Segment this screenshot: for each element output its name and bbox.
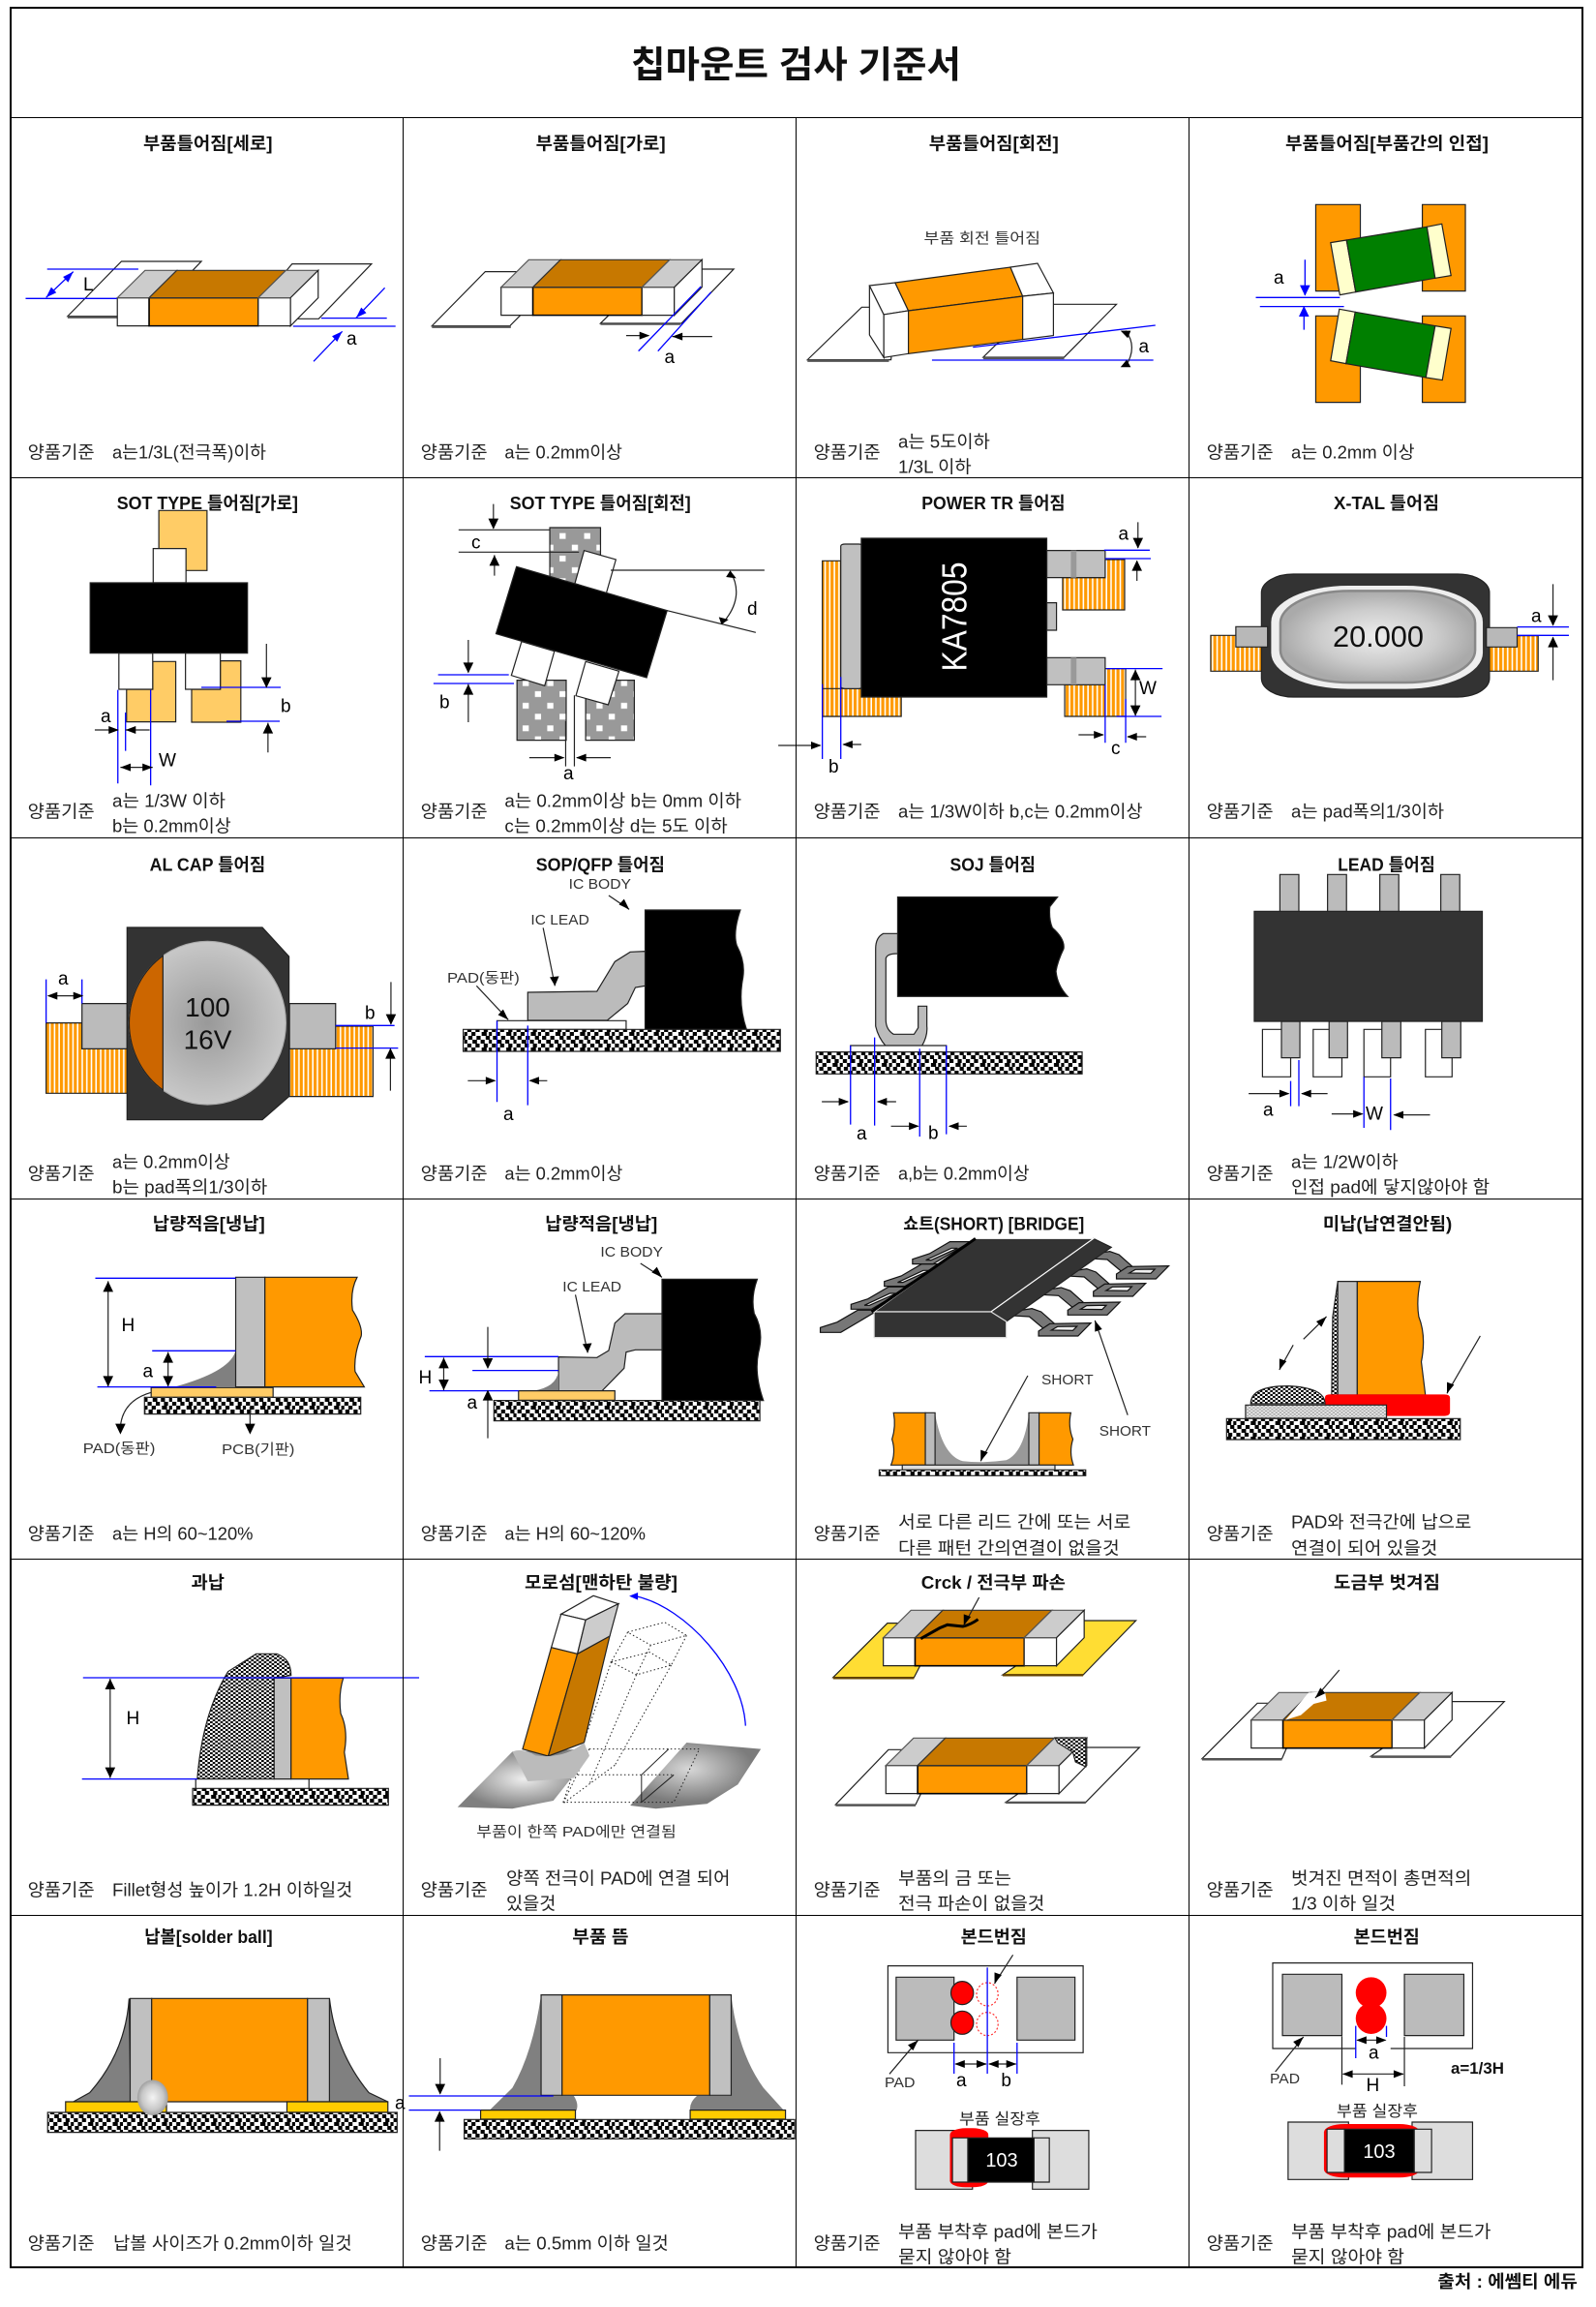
right leads [1011,1252,1169,1336]
acceptance criterion: 양품기준 [421,1880,488,1899]
panel: 도금부 벗겨짐 [1189,1559,1582,1915]
acceptance criterion: 양품기준 [1207,1524,1274,1543]
diagram: peeled plating [1202,1670,1504,1759]
label L: L [83,275,94,295]
caption: 부품 실장후 [959,2110,1040,2128]
acceptance criterion: a는 pad폭의1/3이하 [1291,802,1444,821]
heading: 본드번짐 [961,1928,1027,1947]
acceptance criterion: 양품기준 [814,1164,881,1183]
heading: 부품틀어짐[세로] [143,135,273,154]
label IC BODY: IC BODY [600,1244,663,1260]
acceptance criterion: 양품기준 [1207,1880,1274,1899]
heading: POWER TR 틀어짐 [921,494,1066,513]
acceptance criterion: 양품기준 [28,1524,95,1543]
label PAD: PAD(동판) [83,1441,155,1457]
label a: a [1263,1100,1274,1121]
label IC LEAD: IC LEAD [562,1279,621,1295]
diagram: SOJ lead [816,897,1082,1144]
label b: b [365,1003,376,1024]
part marking: 103 [1363,2141,1396,2163]
acceptance criterion: 양쪽 전극이 PAD에 연결 되어 [506,1868,730,1888]
heading: AL CAP 틀어짐 [150,856,265,875]
panel: 부품틀어짐[부품간의 인접] [1189,118,1582,478]
label PAD: PAD [1270,2071,1300,2087]
diagram: cracked chips [833,1597,1139,1806]
label a: a [956,2071,967,2091]
acceptance criterion: 1/3L 이하 [898,457,972,476]
acceptance criterion [421,443,622,463]
acceptance criterion: c는 0.2mm이상 d는 5도 이하 [504,817,728,836]
acceptance criterion: 양품기준 [814,2234,881,2254]
label a: a [563,764,574,784]
label H: H [126,1709,139,1729]
heading: 모로섬[맨하탄 불량] [525,1573,678,1593]
panel: 쇼트(SHORT) [BRIDGE] [797,1199,1189,1559]
panel: POWER TR 틀어짐 [778,478,1189,837]
caption: 부품 회전 틀어짐 [923,230,1040,247]
diagram: bond spread width [1270,1963,1504,2096]
acceptance criterion: 묻지 않아야 함 [898,2248,1011,2267]
acceptance criterion: PAD와 전극간에 납으로 [1291,1512,1471,1532]
diagram: insufficient solder on IC lead [418,1244,764,1439]
label W: W [1366,1104,1383,1125]
acceptance criterion: 전극 파손이 없을것 [898,1894,1044,1913]
title banner [11,8,1582,118]
chip marking: KA7805 [935,562,975,671]
solder pads [458,1743,761,1808]
acceptance criterion: a는 0.2mm이상 b는 0mm 이하 [504,792,741,811]
heading: 부품 뜸 [572,1928,629,1947]
label PCB: PCB(기판) [222,1442,294,1458]
panel: 부품틀어짐[회전] [797,118,1189,478]
acceptance criterion: 부품 부착후 pad에 본드가 [1291,2223,1491,2242]
acceptance criterion: a는 0.2mm이상 [504,1164,622,1183]
acceptance criterion [28,1524,253,1543]
acceptance criterion [1207,443,1415,463]
label a: a [1274,268,1284,288]
panel: 과납 [11,1559,419,1915]
label b: b [281,697,291,716]
label a: a [101,707,111,727]
diagram: aluminium capacitor [46,927,398,1120]
label H: H [418,1368,432,1388]
panel: 미납(납연결안됨) [1189,1199,1582,1559]
label a: a [1531,606,1542,627]
acceptance criterion: a는 H의 60~120% [504,1524,646,1543]
acceptance criterion: Fillet형성 높이가 1.2H 이하일것 [112,1880,352,1899]
label IC LEAD: IC LEAD [530,912,589,928]
acceptance criterion: a는 1/2W이하 [1291,1152,1399,1171]
acceptance criterion: 부품의 금 또는 [898,1868,1011,1888]
acceptance criterion: 양품기준 [1207,2234,1274,2254]
label SHORT right: SHORT [1099,1423,1151,1440]
label b: b [439,693,450,713]
acceptance criterion [814,1868,1044,1913]
heading: 본드번짐 [1354,1928,1420,1947]
acceptance criterion: 양품기준 [1207,802,1274,821]
acceptance criterion: 연결이 되어 있을것 [1291,1539,1437,1559]
diagram: mounted part [1288,2103,1472,2179]
label IC BODY: IC BODY [569,876,631,893]
label SHORT center: SHORT [1041,1372,1094,1388]
acceptance criterion: a는 1/3W 이하 [112,792,226,811]
cracked chip [833,1597,1136,1678]
heading: LEAD 틀어짐 [1338,856,1435,875]
acceptance criterion [814,1512,1130,1559]
diagram: SOT horizontal [90,510,291,785]
panel: AL CAP 틀어짐 [11,837,404,1199]
bridged fillet [879,1412,1086,1475]
acceptance criterion [814,2223,1098,2267]
acceptance criterion: 묻지 않아야 함 [1291,2248,1404,2267]
heading: X-TAL 틀어짐 [1334,494,1439,513]
label a: a [1369,2043,1379,2064]
diagram: unsoldered joint [1226,1282,1480,1440]
heading: 과납 [192,1573,225,1593]
panel: 납량적음[냉납] IC [404,1199,797,1559]
diagram: rotated chip [807,230,1156,367]
diagram: bond spread before mounting [885,1955,1083,2091]
tilted chip [523,1595,618,1756]
heading: 쇼트(SHORT) [BRIDGE] [903,1215,1084,1234]
acceptance criterion: a는 H의 60~120% [112,1524,254,1543]
acceptance criterion [1207,1152,1490,1197]
acceptance criterion [421,1164,622,1183]
acceptance criterion: 양품기준 [28,1880,95,1899]
diagram: insufficient solder on chip [83,1277,364,1458]
acceptance criterion [421,792,741,836]
formula: a=1/3H [1451,2059,1504,2078]
rotation arrow [635,1596,745,1726]
acceptance criterion: 양품기준 [28,443,95,463]
label a: a [346,329,357,349]
label c: c [471,532,480,554]
label a: a [664,348,676,368]
diagram: IC leads top view [1249,874,1483,1130]
panel: SOP/QFP 틀어짐 [404,837,797,1199]
diagram: horizontal misalignment chip [432,259,734,368]
acceptance criterion: 부품 부착후 pad에 본드가 [898,2223,1098,2242]
acceptance criterion: a는 5도이하 [898,432,990,451]
IC body [874,1238,1111,1338]
heading: 부품틀어짐[부품간의 인접] [1285,135,1489,154]
main title: 칩마운트 검사 기준서 [631,46,961,86]
label H: H [1367,2076,1379,2096]
acceptance criterion [421,1524,646,1543]
left leads [821,1242,971,1332]
label a: a [1138,337,1150,357]
acceptance criterion [1207,802,1444,821]
panel: 본드번짐 (1) [797,1915,1189,2267]
heading: 부품틀어짐[가로] [536,135,666,154]
diagram: power transistor [778,522,1162,777]
acceptance criterion [421,1868,730,1913]
capacitor marking: 100 [185,992,230,1022]
diagram: adjacent parts [1256,204,1465,403]
label a: a [395,2093,406,2114]
acceptance criterion: 양품기준 [28,1164,95,1183]
heading: 부품틀어짐[회전] [929,135,1059,154]
acceptance criterion: a는 0.2mm이상 [504,443,622,463]
diagram: tombstone [458,1593,761,1840]
heading: SOP/QFP 틀어짐 [536,856,665,875]
label H: H [122,1316,135,1336]
electrode-damaged chip [835,1738,1139,1806]
acceptance criterion [814,432,990,476]
acceptance criterion [28,792,231,836]
panel: LEAD 틀어짐 [1189,837,1582,1199]
acceptance criterion: a는 0.5mm 이하 일것 [504,2234,669,2254]
caption: 부품이 한쪽 PAD에만 연결됨 [476,1824,677,1840]
heading: SOT TYPE 틀어짐[가로] [117,494,298,513]
panel: 부품틀어짐[세로] [11,118,404,478]
panel: Crck / 전극부 파손 [797,1559,1189,1915]
acceptance criterion: 양품기준 [814,443,881,463]
acceptance criterion: 양품기준 [1207,1164,1274,1183]
acceptance criterion: a,b는 0.2mm이상 [898,1164,1030,1183]
acceptance criterion: 다른 패턴 간의연결이 없을것 [898,1539,1120,1559]
heading: 납량적음[냉납] [153,1215,265,1234]
caption: 부품 실장후 [1337,2103,1418,2120]
acceptance criterion: 양품기준 [814,1880,881,1899]
panel: SOT TYPE 틀어짐[가로] [11,478,404,837]
panel: 납량적음[냉납] chip [11,1199,404,1559]
acceptance criterion: 양품기준 [421,443,488,463]
acceptance criterion: a는 0.2mm 이상 [1291,443,1415,463]
label b: b [828,757,839,777]
heading: 납량적음[냉납] [545,1215,657,1234]
panel: 부품틀어짐[가로] [404,118,797,478]
source credit: 출처 : 에쎔티 에듀 [1437,2272,1578,2292]
capacitor marking [184,992,232,1054]
acceptance criterion: 양품기준 [421,2234,488,2254]
label a: a [58,969,69,989]
panel: 부품 뜸 [395,1915,797,2267]
label b: b [1001,2071,1011,2091]
acceptance criterion: b는 0.2mm이상 [112,817,231,836]
label b: b [928,1123,939,1144]
acceptance criterion [421,2234,669,2254]
acceptance criterion: 양품기준 [814,1524,881,1543]
acceptance criterion: 양품기준 [1207,443,1274,463]
acceptance criterion: 서로 다른 리드 간에 또는 서로 [898,1512,1130,1532]
ghost outline of chip [562,1623,700,1804]
diagram: SOT rotated [434,504,765,784]
acceptance criterion: a는 1/3W이하 b,c는 0.2mm이상 [898,802,1142,821]
label c: c [1111,739,1121,759]
label W: W [159,751,176,771]
panel: 본드번짐 (2) [1189,1915,1582,2267]
acceptance criterion: 양품기준 [814,802,881,821]
acceptance criterion [814,1164,1030,1183]
diagram: mounted part [916,2110,1089,2189]
label PAD: PAD(동판) [447,970,520,987]
panel: SOJ 틀어짐 [797,837,1189,1199]
acceptance criterion: 양품기준 [421,1164,488,1183]
acceptance criterion: 있을것 [506,1894,556,1913]
heading: SOT TYPE 틀어짐[회전] [510,494,691,513]
label a: a [1119,525,1129,544]
acceptance criterion: 벗겨진 면적이 총면적의 [1291,1868,1471,1888]
acceptance criterion [1207,1868,1471,1913]
diagram: solder ball [47,1998,397,2133]
heading: 미납(납연결안됨) [1323,1215,1452,1234]
acceptance criterion: 양품기준 [28,2234,95,2254]
acceptance criterion: 납볼 사이즈가 0.2mm이하 일것 [113,2234,352,2254]
acceptance criterion [1207,1512,1471,1559]
acceptance criterion: 1/3 이하 일것 [1291,1894,1396,1913]
diagram: lifted part [395,1995,795,2151]
label a: a [467,1393,478,1413]
heading: Crck / 전극부 파손 [921,1573,1066,1593]
diagram: solder bridge [821,1238,1169,1475]
label a: a [503,1105,514,1125]
acceptance criterion: 양품기준 [421,802,488,821]
acceptance criterion: 인접 pad에 닿지않아야 함 [1291,1177,1490,1197]
heading: 납볼[solder ball] [144,1928,273,1947]
diagram: excess solder [82,1654,419,1806]
crystal marking: 20.000 [1333,620,1424,653]
diagram: vertical misalignment chip [25,261,396,361]
acceptance criterion [28,443,266,463]
acceptance criterion [28,1152,268,1197]
diagram: crystal [1211,574,1569,697]
acceptance criterion: a는1/3L(전극폭)이하 [112,443,266,463]
acceptance criterion [1207,2223,1491,2267]
acceptance criterion: 양품기준 [28,802,95,821]
panel: 모로섬[맨하탄 불량] [404,1559,797,1915]
panel: SOT TYPE 틀어짐[회전] [404,478,797,837]
diagram: SOP lead [447,876,780,1125]
heading: 도금부 벗겨짐 [1334,1573,1440,1593]
heading: SOJ 틀어짐 [950,856,1036,875]
label W: W [1139,679,1157,699]
acceptance criterion: 양품기준 [421,1524,488,1543]
panel: 납볼[solder ball] [11,1915,404,2267]
label PAD: PAD [885,2075,916,2091]
label d: d [747,599,758,620]
label a: a [857,1124,867,1144]
part marking: 103 [985,2150,1018,2171]
acceptance criterion: b는 pad폭의1/3이하 [112,1177,268,1197]
acceptance criterion: a는 0.2mm이상 [112,1152,230,1171]
capacitor marking: 16V [184,1024,232,1054]
label a: a [143,1361,153,1382]
panel: X-TAL 틀어짐 [1189,478,1582,837]
